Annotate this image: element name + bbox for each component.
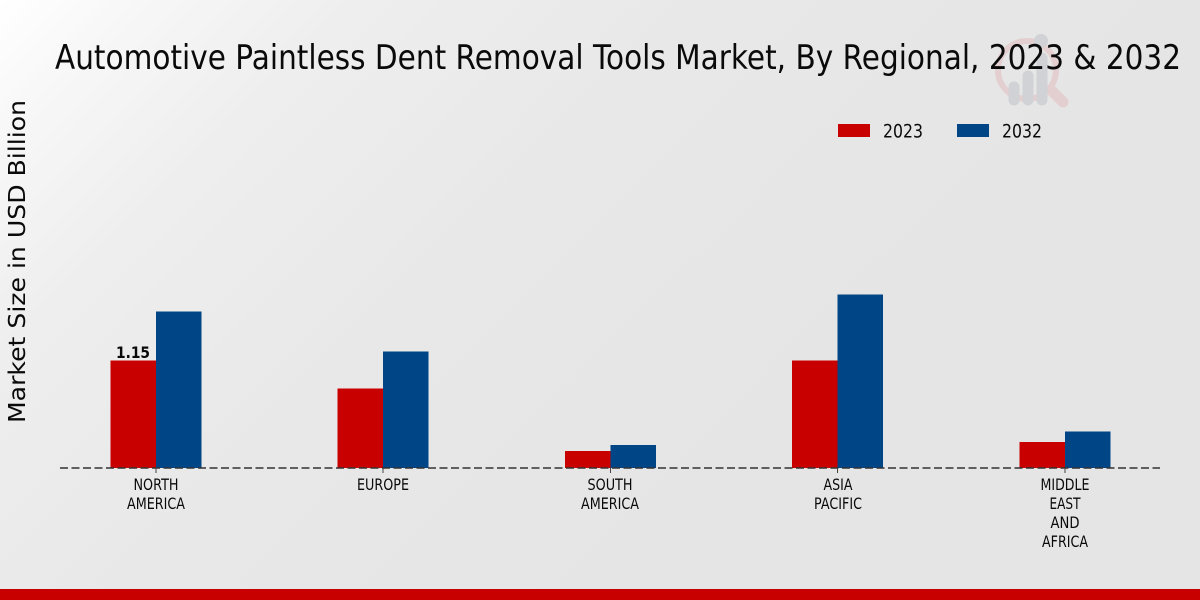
axis label: Asia Pacific: PACIFIC [814,494,862,513]
axis label: Middle East and Africa: AFRICA [1042,532,1088,551]
legend item: 2032: 2032 [1002,120,1042,142]
axis label: Middle East and Africa: MIDDLE [1040,475,1090,494]
legend item: 2032 [957,120,1042,142]
axis label: Asia Pacific [814,475,862,513]
icon: watermark logo [998,34,1063,102]
axis label: North America [127,475,185,513]
legend item: 2023 [838,120,923,142]
baseline [60,467,1160,469]
axis label: Middle East and Africa: EAST [1050,494,1081,513]
axis label: North America: NORTH [134,475,178,494]
axis label: Asia Pacific: ASIA [824,475,853,494]
axis label: South America: AMERICA [581,494,639,513]
bars: South America [565,445,656,468]
axis label: South America: SOUTH [588,475,632,494]
footer bar [0,589,1200,600]
data label: 1.15: 1.15 [116,343,150,362]
axis label: Europe: EUROPE [357,475,409,494]
legend [838,120,1042,142]
bars: Europe [338,352,428,468]
legend item: 2023: 2023 [883,120,923,142]
bars: North America [110,312,202,468]
axis label: Middle East and Africa: AND [1050,513,1080,532]
axis label: Middle East and Africa [1040,475,1090,551]
axis label: South America [581,475,639,513]
bar chart [60,294,1160,473]
axis label: North America: AMERICA [127,494,185,513]
y-axis label: Market Size in USD Billion [3,100,31,423]
bars: Middle East and Africa [1020,432,1110,468]
bars: Asia Pacific [792,294,883,468]
